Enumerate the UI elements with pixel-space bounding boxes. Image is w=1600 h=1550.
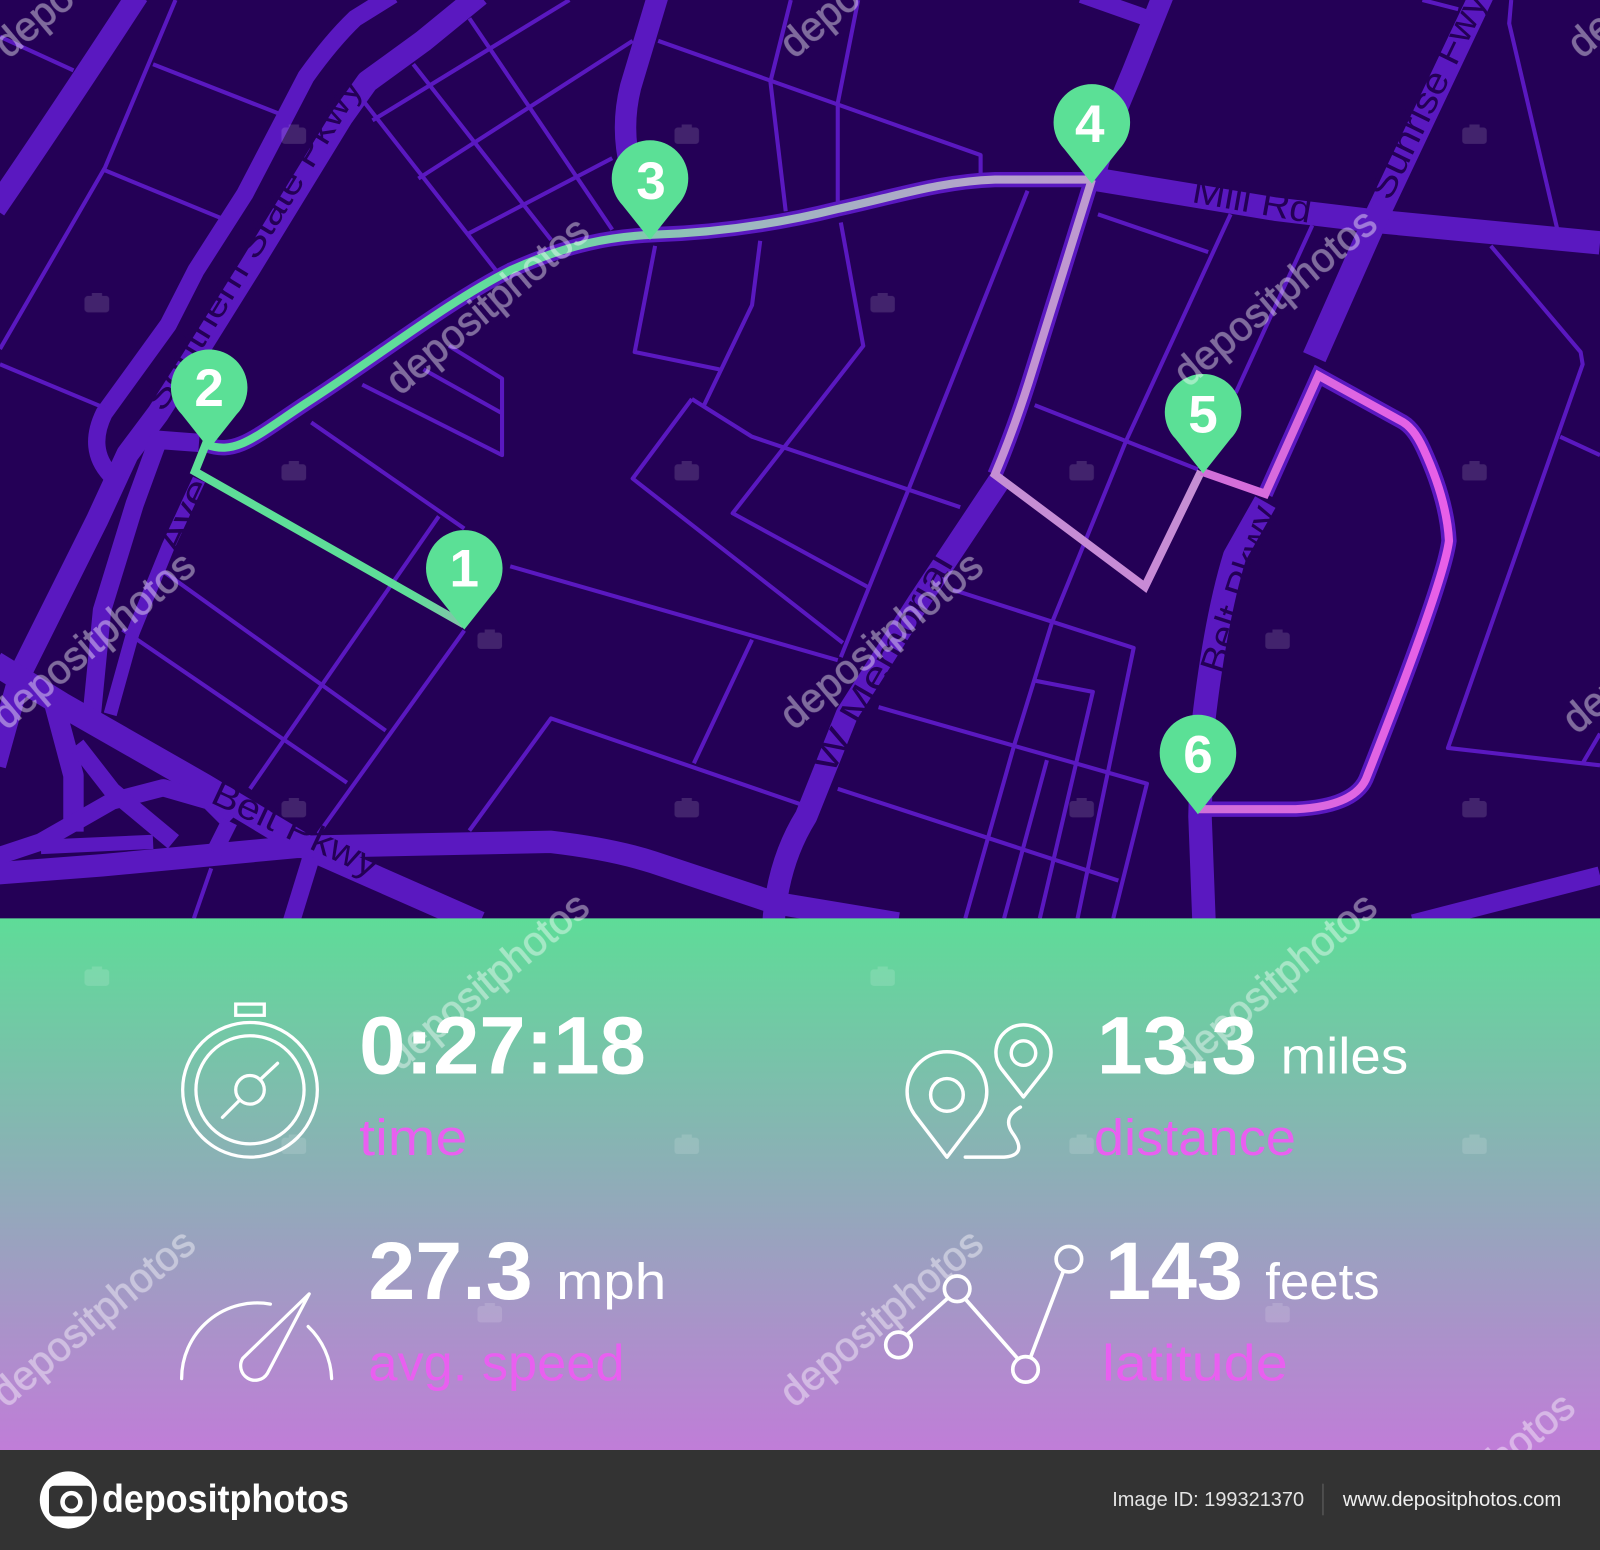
value: latitude: 143 bbox=[1105, 1226, 1243, 1317]
label: Belt Pkwy east: Belt Pkwy bbox=[1192, 500, 1285, 678]
road labels bbox=[135, 0, 1496, 885]
stat: average speed bbox=[182, 1226, 666, 1392]
logo wordmark: depositphotos bbox=[102, 1478, 349, 1521]
watermarks: depositphotos bbox=[1164, 882, 1385, 1078]
watermarks: depositphotos bbox=[376, 882, 597, 1078]
pin 5: 5 bbox=[1188, 386, 1218, 445]
label: Mill Rd: Mill Rd bbox=[1189, 170, 1315, 231]
value: time: 0:27:18 bbox=[359, 1000, 646, 1091]
stat: latitude bbox=[886, 1226, 1380, 1392]
image id: Image ID: 199321370 bbox=[1112, 1489, 1304, 1511]
label: Southern State Pkwy: Southern State Pkwy bbox=[135, 69, 370, 417]
pin 3: 3 bbox=[636, 152, 666, 211]
value: distance: 13.3 bbox=[1097, 1000, 1257, 1091]
unit: mph: mph bbox=[556, 1253, 666, 1310]
route leg: stop 2 to 4 bbox=[207, 180, 1092, 448]
unit: miles: miles bbox=[1281, 1027, 1408, 1084]
route leg: stop 4 to 5 bbox=[995, 180, 1201, 587]
stat: distance bbox=[907, 1000, 1408, 1166]
pin 5 bbox=[1165, 374, 1241, 473]
label: latitude: latitude bbox=[1102, 1335, 1288, 1392]
watermarks: depositphotos bbox=[1164, 199, 1385, 395]
label: Sunrise Fwy: Sunrise Fwy bbox=[1360, 0, 1496, 206]
watermarks: depositphotos bbox=[770, 542, 991, 738]
pin 1 bbox=[426, 530, 503, 630]
label: W Memorial: W Memorial bbox=[803, 547, 961, 780]
pin 4 bbox=[1054, 84, 1130, 184]
icon: stopwatch bbox=[183, 1004, 317, 1157]
pin 1: 1 bbox=[450, 540, 479, 599]
label: Belt Pkwy: Belt Pkwy bbox=[206, 772, 387, 885]
value: speed: 27.3 bbox=[368, 1226, 533, 1317]
map background bbox=[0, 0, 1600, 918]
watermarks: depositphotos bbox=[376, 207, 597, 403]
stat: time bbox=[183, 1000, 646, 1166]
label: time: time bbox=[359, 1109, 467, 1166]
street map: major roads bbox=[0, 0, 1600, 923]
route halo bbox=[207, 180, 1092, 474]
website: www.depositphotos.com bbox=[1342, 1489, 1561, 1511]
pin 6 bbox=[1160, 715, 1236, 814]
icon: elevation line chart bbox=[886, 1246, 1082, 1382]
label: avg. speed: avg. speed bbox=[368, 1335, 624, 1392]
pin 2 bbox=[171, 349, 247, 449]
route leg: stop 5 to 6 bbox=[1199, 376, 1449, 809]
route leg: stop 1 to 2 bbox=[195, 441, 464, 624]
icon: speedometer bbox=[182, 1294, 332, 1380]
pin 2: 2 bbox=[194, 359, 224, 418]
icon: camera logo bbox=[40, 1471, 97, 1529]
pin 4: 4 bbox=[1075, 95, 1105, 154]
pin 3 bbox=[612, 140, 688, 240]
street map: minor streets bbox=[0, 0, 1600, 918]
pin 6: 6 bbox=[1183, 725, 1213, 784]
stats panel background bbox=[0, 918, 1600, 1450]
route bbox=[195, 180, 1449, 809]
unit: feets: feets bbox=[1265, 1253, 1380, 1310]
watermarks: depositphotos bbox=[770, 1219, 991, 1415]
map pins bbox=[171, 84, 1241, 814]
label: Ave: Ave bbox=[149, 472, 219, 560]
label: distance: distance bbox=[1094, 1109, 1296, 1166]
icon: route pins bbox=[907, 1025, 1051, 1157]
footer bar bbox=[0, 1450, 1600, 1550]
